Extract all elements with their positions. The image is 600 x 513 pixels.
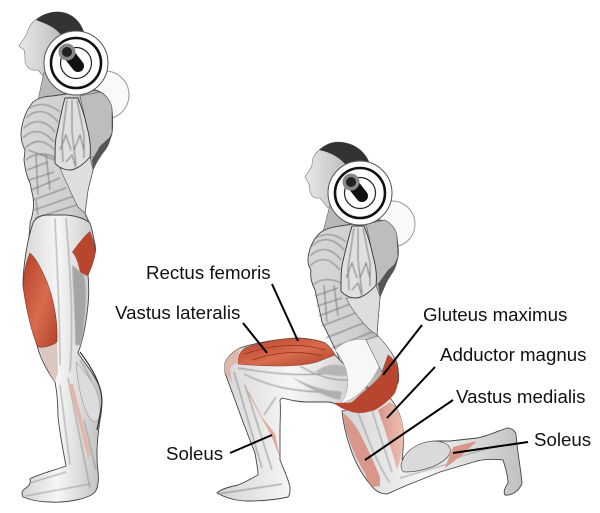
standing head xyxy=(19,12,84,78)
standing hair xyxy=(36,12,84,35)
label: Soleus left: Soleus xyxy=(166,443,223,464)
figure: standing lunge start position xyxy=(19,12,129,502)
standing torso fibres xyxy=(23,105,80,218)
standing torso xyxy=(21,90,113,273)
standing calf back line xyxy=(80,352,102,430)
lunge neck xyxy=(323,198,358,232)
lunge rear calf xyxy=(401,441,450,472)
standing leg xyxy=(22,215,102,502)
standing arm xyxy=(55,98,90,170)
standing calf xyxy=(76,362,100,421)
lunge front leg detail xyxy=(218,366,362,494)
lunge rear shoulder xyxy=(366,220,398,284)
lunge head xyxy=(305,142,369,208)
standing arm fibres xyxy=(60,100,84,168)
standing back shadow xyxy=(92,136,111,170)
lunge rear leg xyxy=(342,398,522,495)
standing leg detail xyxy=(26,218,96,496)
lunge torso xyxy=(308,220,399,398)
muscle: front soleus xyxy=(243,384,280,458)
leader lines xyxy=(230,284,528,460)
muscle: standing gluteus xyxy=(72,231,95,276)
muscle: lunge knee tint xyxy=(225,348,240,383)
back weight plate xyxy=(81,71,129,119)
lunge plate xyxy=(328,161,392,225)
figure: lunge position xyxy=(217,142,522,501)
label: Soleus right: Soleus xyxy=(534,429,591,450)
standing plate xyxy=(44,31,108,95)
lunge hip white band xyxy=(335,339,382,404)
label: Rectus femoris: Rectus femoris xyxy=(146,262,271,283)
lunge back shadow xyxy=(378,262,397,297)
lunge arm xyxy=(341,226,376,298)
lunge inner thigh shadow xyxy=(290,376,342,400)
lunge thigh shadows xyxy=(315,365,351,376)
muscle: vastus medialis xyxy=(343,413,380,487)
lunge front leg xyxy=(217,338,382,501)
standing thigh side shadow xyxy=(72,265,86,345)
standing lat band xyxy=(60,157,93,213)
standing rear shoulder xyxy=(80,92,112,157)
rectus femoris fibre lines xyxy=(245,345,325,360)
label: Gluteus maximus: Gluteus maximus xyxy=(423,304,567,325)
muscle: gluteus maximus xyxy=(333,355,398,413)
label: Adductor magnus: Adductor magnus xyxy=(440,344,586,365)
muscle: rectus femoris and vastus lateralis xyxy=(238,338,335,366)
lunge arm fibres xyxy=(346,228,370,296)
muscle: rear soleus xyxy=(445,441,477,468)
muscle: adductor magnus xyxy=(378,402,403,470)
lunge lat band xyxy=(346,285,380,335)
lunge rear leg detail xyxy=(358,410,500,483)
lunge torso fibres xyxy=(310,235,372,348)
standing knee tint xyxy=(39,343,58,382)
label: Vastus medialis: Vastus medialis xyxy=(456,386,585,407)
label: Vastus lateralis: Vastus lateralis xyxy=(115,302,240,323)
muscle: standing vastus lateralis xyxy=(23,253,57,347)
standing neck xyxy=(38,65,72,100)
lunge rear hip xyxy=(366,336,397,372)
lunge hair xyxy=(319,142,369,164)
lunge back weight plate xyxy=(369,201,415,247)
muscle: standing soleus xyxy=(69,384,91,458)
